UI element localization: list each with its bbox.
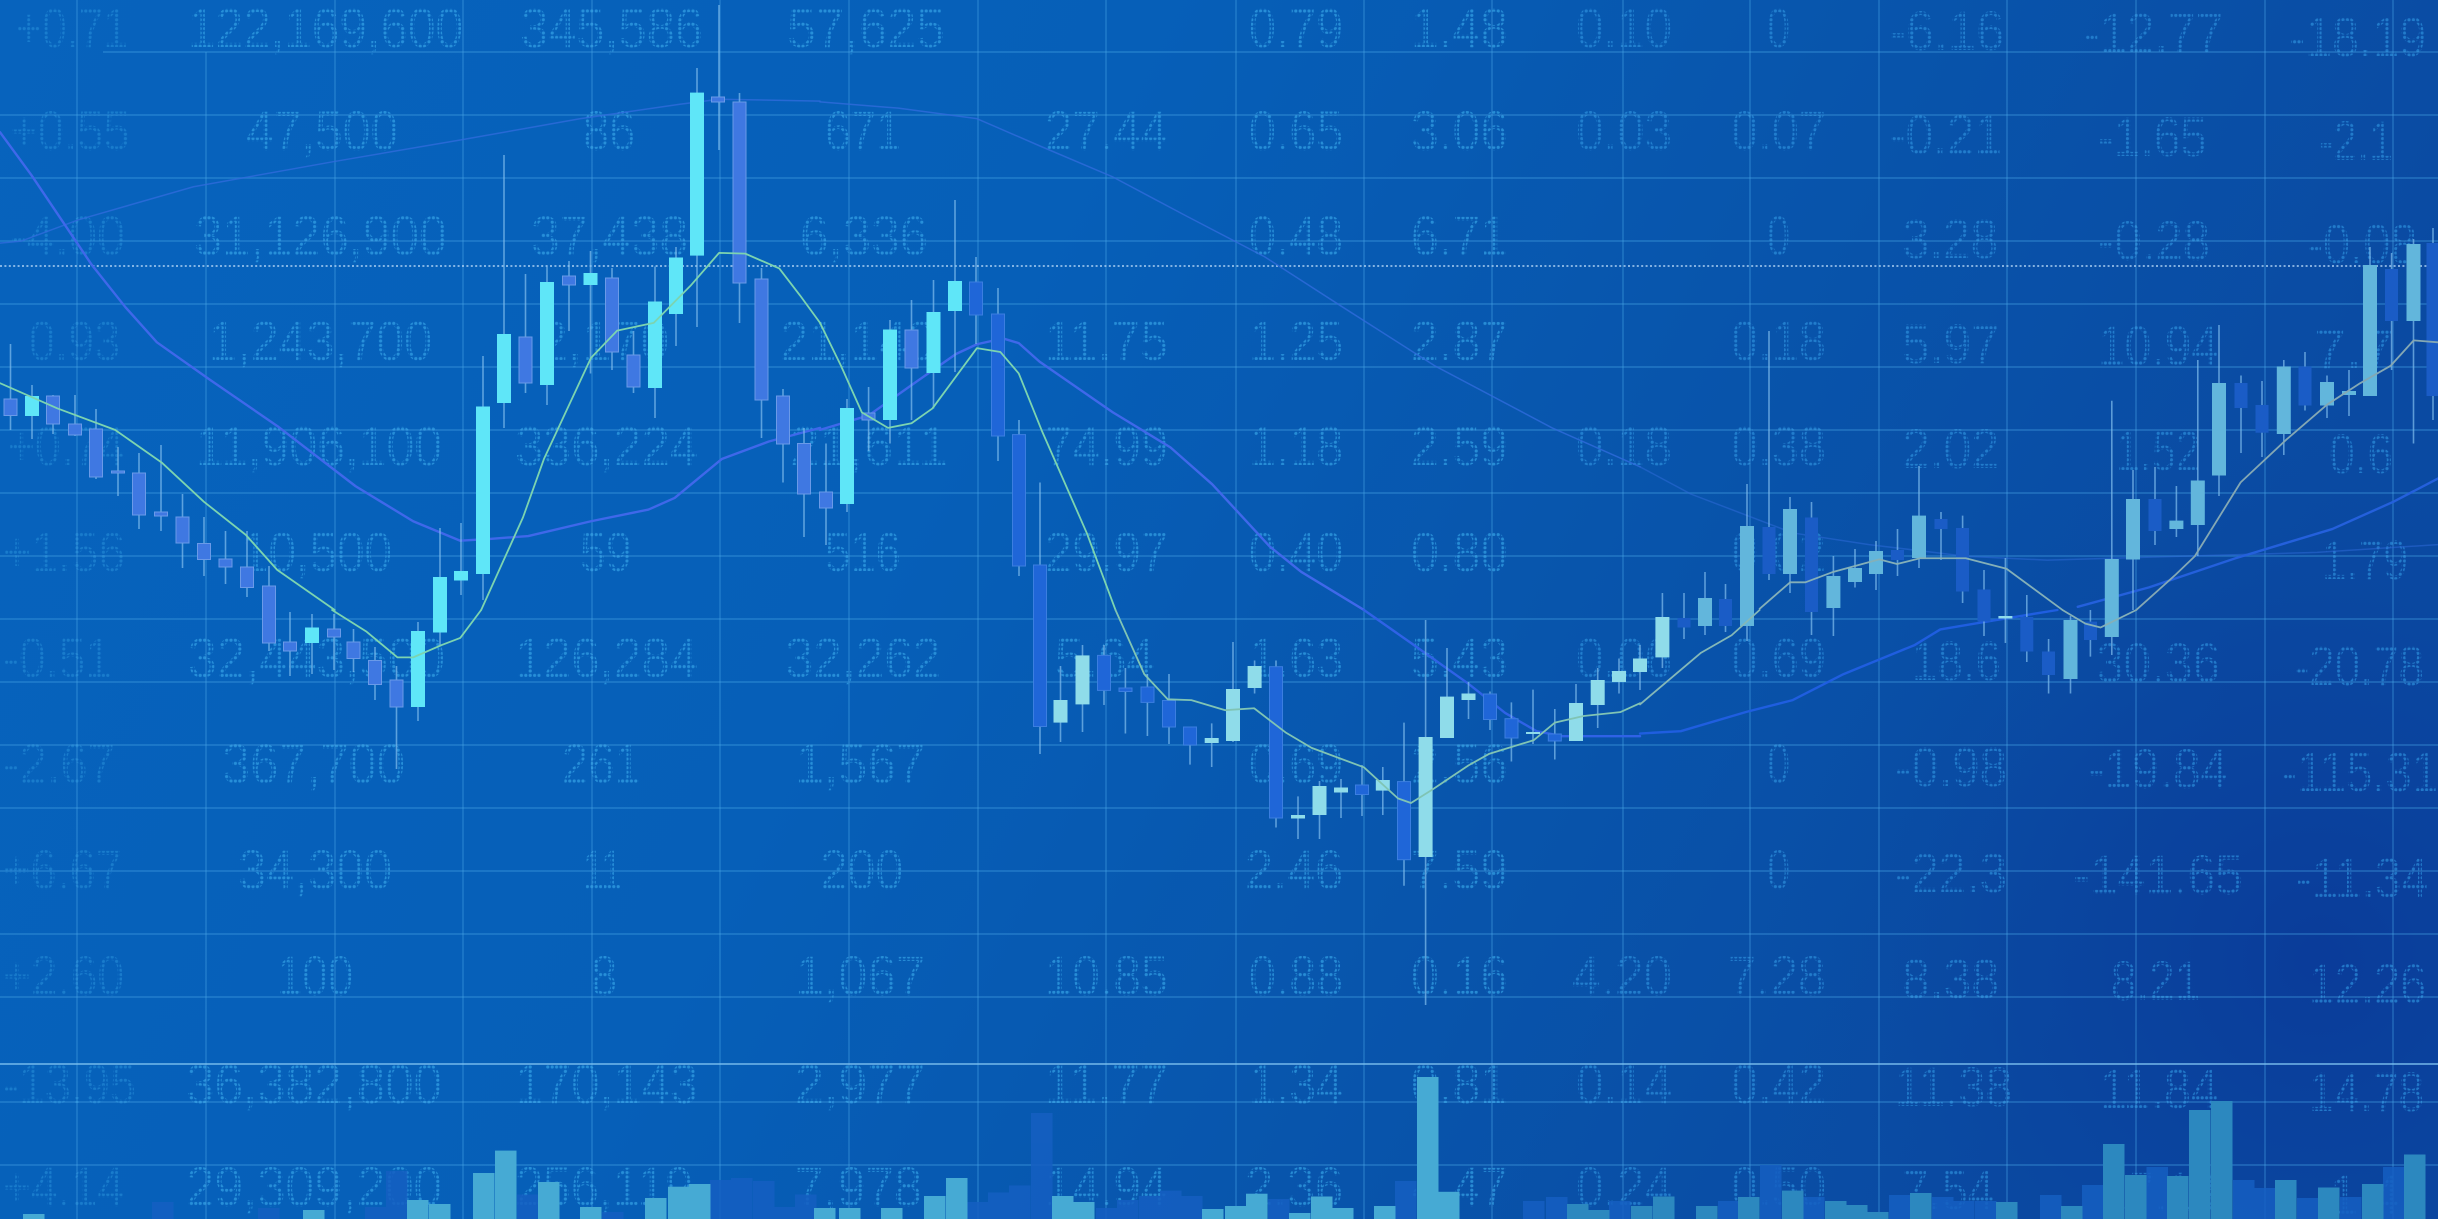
column: yield: 3.06 [1411, 99, 1508, 162]
column: value: 21,611 [790, 414, 948, 477]
column: trades: 126,284 [515, 626, 698, 689]
column: debt: 0.07 [1731, 99, 1826, 162]
column: percent change: +1.56 [3, 520, 125, 583]
column: percent change: +6.67 [3, 838, 122, 901]
column: three-month return: 30.36 [2096, 631, 2220, 694]
candles: trough section [1054, 620, 1561, 1005]
column: one-month return: -22.3 [1895, 841, 2007, 904]
column: yield: 0.80 [1411, 520, 1508, 583]
column: one-month return: 2.02 [1902, 417, 1999, 480]
column: three-month return: -19.84 [2088, 737, 2228, 800]
column: yield: 6.71 [1411, 204, 1508, 267]
pale volume bars, left [23, 1077, 1460, 1219]
column: trades: 86 [583, 99, 635, 162]
column: ratio: 11.77 [1045, 1052, 1168, 1115]
column: debt: 0.69 [1731, 626, 1826, 689]
column: ratio: 29.97 [1045, 520, 1168, 583]
column: yield: 5.43 [1411, 626, 1508, 689]
column: value: 6,336 [800, 204, 928, 267]
column: yield: 0.81 [1411, 1052, 1508, 1115]
column: price to book: 1.18 [1249, 414, 1343, 477]
column: ratio: 74.99 [1045, 414, 1168, 477]
column: percent change: +0.55 [10, 99, 130, 162]
column: trades: 11 [583, 838, 622, 901]
column: one-month return: 5.97 [1902, 312, 1999, 375]
column: value: 21,140 [780, 309, 935, 372]
column: volume: 1,243,700 [209, 309, 432, 372]
column: one-month return: 8.38 [1902, 947, 1999, 1010]
column: percent change: +4.14 [3, 1155, 124, 1218]
column: volume [186, 0, 463, 1218]
column: value: 1,067 [795, 944, 925, 1007]
long moving average line (faint) [0, 99, 2438, 560]
column: volume: 367,700 [222, 732, 405, 795]
column: percent change: 0.93 [29, 309, 120, 372]
column: value: 516 [825, 520, 901, 583]
column: one-month return: 11.38 [1895, 1055, 2012, 1118]
column: volume: 29,309,200 [186, 1155, 442, 1218]
candles: right rally [2105, 228, 2438, 655]
column: three-month return: 8.21 [2111, 949, 2200, 1012]
column: three-month return: -141.65 [2073, 843, 2243, 906]
column: margin: 0.24 [1576, 1155, 1672, 1218]
short moving average line (green) [0, 253, 2438, 803]
column: price to book: 1.25 [1249, 309, 1343, 372]
candles: recovery section [1569, 331, 2097, 741]
column: annual return [2281, 5, 2438, 1219]
column: yield: 4.47 [1411, 1155, 1508, 1218]
column: percent change [3, 0, 136, 1218]
column: trades: 256,119 [515, 1155, 693, 1218]
column: three-month return: 1.52 [2116, 419, 2200, 482]
candles: falling left section [4, 344, 425, 769]
column: yield [1411, 0, 1508, 1218]
column: value: 7,978 [795, 1155, 922, 1218]
column: yield: 2.87 [1411, 309, 1508, 372]
volume bars [23, 1077, 2426, 1219]
column: three-month return: -1.65 [2098, 105, 2207, 168]
column: ratio: 11.75 [1045, 309, 1168, 372]
column: ratio: 14.94 [1045, 1155, 1168, 1218]
column: price to book [1245, 0, 1343, 1218]
column: volume: 31,126,900 [194, 204, 447, 267]
column: price to book: 0.48 [1249, 204, 1343, 267]
column: trades [515, 0, 703, 1218]
column: price to book: 0.40 [1249, 520, 1343, 583]
column: margin: 0.14 [1576, 1052, 1672, 1115]
column: annual return: 1.79 [2322, 528, 2408, 591]
column: percent change: -4.00 [10, 204, 125, 267]
column: debt: 0.02 [1731, 520, 1826, 583]
column: value: 1,567 [795, 732, 925, 795]
column: price to book: 2.46 [1245, 838, 1343, 901]
column: yield: 2.56 [1411, 732, 1508, 795]
column: value: 200 [820, 838, 903, 901]
column: trades: 2,170 [539, 309, 669, 372]
column: trades: 336,224 [515, 414, 698, 477]
column: value [780, 0, 948, 1218]
column: percent change: -2.67 [3, 732, 115, 795]
column: ratio: 10.85 [1045, 944, 1168, 1007]
column: three-month return [2073, 1, 2243, 1219]
column: annual return: -0.08 [2307, 212, 2417, 275]
column: percent change: -0.51 [3, 626, 112, 689]
column: three-month return: -12.77 [2083, 1, 2223, 64]
column: volume: 36,382,800 [186, 1052, 442, 1115]
column: annual return: -2.1 [2319, 109, 2393, 172]
column: yield: 2.59 [1411, 414, 1508, 477]
column: debt: 0.50 [1731, 1155, 1826, 1218]
column: value: 2,977 [795, 1052, 925, 1115]
column: volume: 100 [277, 944, 353, 1007]
column: three-month return: -0.28 [2098, 209, 2210, 272]
column: one-month return: 3.28 [1902, 207, 1998, 270]
column: annual return: 7.7 [2314, 317, 2394, 380]
column: price to book: 2.36 [1245, 1155, 1343, 1218]
column: debt: 0.38 [1731, 414, 1826, 477]
column: debt: 0 [1767, 838, 1790, 901]
pale volume bars, right [1567, 1101, 2426, 1219]
column: value: 32,262 [785, 626, 941, 689]
column: volume: 10,500 [241, 520, 392, 583]
column: three-month return: 11.84 [2100, 1057, 2218, 1120]
column: volume: 11,906,100 [196, 414, 442, 477]
column: price to book: 0.69 [1249, 732, 1343, 795]
column: debt: 0.42 [1731, 1052, 1826, 1115]
column: margin: 4.20 [1572, 944, 1672, 1007]
column: price to book: 0.65 [1249, 99, 1343, 162]
column: trades: 170,143 [515, 1052, 698, 1115]
column: debt: 0.18 [1731, 309, 1826, 372]
column: volume: 32,443,500 [188, 626, 445, 689]
column: trades: 59 [580, 520, 632, 583]
column: debt: 7.28 [1728, 944, 1826, 1007]
column: one-month return [1889, 0, 2012, 1219]
column: price to book: 1.34 [1249, 1052, 1343, 1115]
column: debt [1728, 0, 1826, 1218]
column: annual return: 0.6 [2329, 422, 2393, 485]
column: trades: 8 [591, 944, 617, 1007]
blue volume bars [152, 1113, 2404, 1219]
column: margin: 0.18 [1576, 414, 1672, 477]
column: percent change: +2.60 [3, 944, 124, 1007]
column: price to book: 0.88 [1249, 944, 1343, 1007]
column: debt: 0 [1767, 204, 1790, 267]
column: volume: 34,300 [238, 838, 392, 901]
column: trades: 37,438 [531, 204, 688, 267]
column: ratio: 5.64 [1055, 626, 1155, 689]
column: ratio: 27.44 [1045, 99, 1168, 162]
column: yield: 0.16 [1411, 944, 1508, 1007]
candles: first rally [433, 5, 1046, 754]
column: debt: 0 [1767, 732, 1790, 795]
column: ratio [1045, 99, 1168, 1218]
column: one-month return: -0.98 [1895, 735, 2007, 798]
column: percent change: -13.95 [3, 1052, 136, 1115]
column: margin: 0.06 [1576, 626, 1672, 689]
column: one-month return: -6.16 [1889, 0, 2004, 62]
column: price to book: 1.63 [1249, 626, 1343, 689]
column: one-month return: -0.21 [1889, 103, 2002, 166]
column: margin: 0.03 [1576, 99, 1672, 162]
column: yield: 7.59 [1411, 838, 1508, 901]
column: one-month return: 18.6 [1912, 629, 2001, 692]
column: volume: 47,500 [246, 99, 398, 162]
column: value: 671 [825, 99, 901, 162]
column: percent change: +0.74 [8, 414, 125, 477]
column: trades: 261 [562, 732, 641, 795]
column: three-month return: 10.94 [2098, 314, 2218, 377]
column: margin [1572, 0, 1672, 1218]
medium moving average line (blue) [0, 132, 2438, 736]
